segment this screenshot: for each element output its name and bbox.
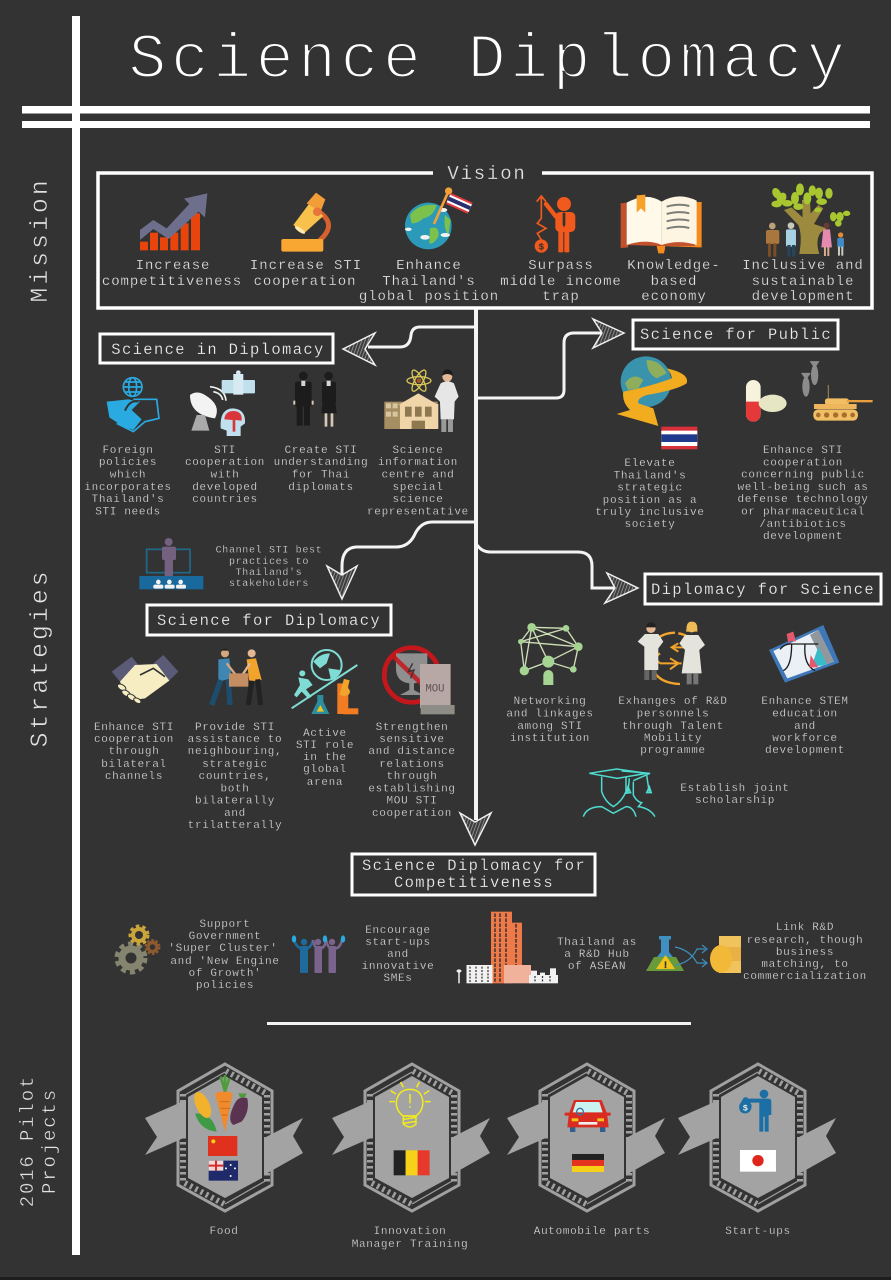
text: Enhance STEM education xyxy=(761,696,849,757)
icon: microscope xyxy=(281,193,329,252)
heading: Science Diplomacy for Competitiveness: Science Diplomacy for xyxy=(362,857,586,875)
text: Science information centre: information xyxy=(378,457,458,469)
text: Provide STI assistance: both xyxy=(220,784,250,796)
flag: Germany xyxy=(572,1154,604,1172)
vision heading: Vision xyxy=(447,163,527,185)
vision labels: development xyxy=(752,289,854,305)
text: Enhance STEM education: workforce xyxy=(772,733,838,745)
text: Encourage start-ups: start-ups xyxy=(365,937,431,949)
text: Networking and linkages: Networking xyxy=(514,696,586,708)
icon: prohibited glass and MOU xyxy=(384,648,455,714)
icon: prohibited glass and MOU: MOU xyxy=(425,684,445,696)
heading: Diplomacy for Science xyxy=(645,574,881,604)
heading: Science in Diplomacy xyxy=(100,334,333,363)
vision labels: Increase xyxy=(136,258,210,274)
text: Enhance STEM education: and xyxy=(794,721,816,733)
vision labels: Increase STI xyxy=(250,258,362,274)
text: Enhance STI public well-being: or pharmaceutical xyxy=(741,506,865,518)
text: Establish joint scholarship xyxy=(680,783,790,807)
text: Elevate Thailand's position: Thailand's xyxy=(614,470,686,482)
vision labels: Surpass xyxy=(528,258,594,274)
text: Enhance STI public well-being xyxy=(737,445,869,543)
text: Support Government: and 'New Engine xyxy=(170,956,280,968)
text: Link R&D research: business xyxy=(776,947,834,959)
text: Encourage start-ups: innovative xyxy=(362,961,434,973)
heading: Science Diplomacy for Competitiveness: Competitiveness xyxy=(394,874,554,892)
text: Strengthen sensitive relations: and distance xyxy=(368,746,456,758)
arrow: to Science for Diplomacy xyxy=(327,566,357,599)
panel: pilot projects xyxy=(145,1064,836,1251)
text: Support Government: 'Super Cluster' xyxy=(168,943,278,955)
text: Science information centre: science xyxy=(393,494,443,506)
vision labels: middle income xyxy=(500,274,622,290)
badge: Innovation xyxy=(332,1064,490,1211)
text: Establish joint scholarship: scholarship xyxy=(695,795,775,807)
text: Thailand as R&D Hub: a R&D Hub xyxy=(564,949,630,961)
text: Channel STI best practices: Channel STI best xyxy=(216,544,322,556)
flow lines xyxy=(342,309,618,820)
flag: Belgium xyxy=(394,1150,430,1175)
badge: Automobile parts xyxy=(507,1064,665,1211)
vision labels: sustainable xyxy=(752,274,854,290)
text: Foreign policies: Foreign xyxy=(103,445,153,457)
text: Create STI understanding: Create STI xyxy=(285,445,357,457)
text: Elevate Thailand's position: position as a xyxy=(603,495,697,507)
text: Thailand as R&D Hub: Thailand as xyxy=(557,937,637,949)
text: Active STI role: Active xyxy=(303,728,347,740)
label: Mission: Mission xyxy=(26,177,55,303)
text: Strengthen sensitive relations: establishing xyxy=(368,784,456,796)
text: Provide STI assistance: neighbouring, xyxy=(188,746,282,758)
text: Strengthen sensitive relations: relations xyxy=(379,759,445,771)
icon: tree and people xyxy=(766,183,850,257)
text: Strengthen sensitive relations: cooperation xyxy=(372,808,452,820)
icon: pills, bombs and tank xyxy=(746,362,873,422)
text: Support Government: policies xyxy=(196,980,254,992)
text: Foreign policies: which xyxy=(110,470,146,482)
arrow: to Science for Public xyxy=(593,319,624,348)
panel: Science for Public items xyxy=(595,356,873,543)
label: Automobile parts: Automobile parts xyxy=(534,1226,650,1238)
label: Innovation Manager Training: Manager Training xyxy=(352,1239,468,1251)
text: Provide STI assistance: countries, xyxy=(199,771,271,783)
flag: Japan xyxy=(740,1150,776,1172)
label: Innovation Manager Training xyxy=(352,1226,468,1251)
vision labels xyxy=(102,258,864,305)
icon: gears xyxy=(117,926,160,972)
text: Enhance STI cooperation: Enhance STI xyxy=(94,722,174,734)
text: Support Government: Government xyxy=(189,931,261,943)
text: Enhance STI cooperation: channels xyxy=(105,771,163,783)
text: Provide STI assistance: trilatterally xyxy=(188,820,282,832)
text: Networking and linkages: institution xyxy=(510,733,590,745)
icon: raised hands start-ups xyxy=(292,935,345,973)
text: Active STI role: arena xyxy=(307,777,343,789)
icon: man with money bag xyxy=(739,1090,771,1132)
flag: China xyxy=(208,1136,237,1156)
text: Enhance STEM education: development xyxy=(765,745,845,757)
heading: Science Diplomacy for Competitiveness xyxy=(352,854,595,895)
text: Networking and linkages xyxy=(506,696,594,745)
text: Enhance STI cooperation xyxy=(94,722,174,783)
text: Encourage start-ups: SMEs xyxy=(383,973,413,985)
text: Link R&D research: research, though xyxy=(747,935,863,947)
text: Support Government: Support xyxy=(200,919,250,931)
icon: presenter and audience xyxy=(139,538,203,589)
text: Foreign policies: STI needs xyxy=(95,506,161,518)
label: Food: Food xyxy=(209,1226,239,1238)
text: Provide STI assistance: strategic xyxy=(202,759,268,771)
label: Start-ups: Start-ups xyxy=(725,1226,791,1238)
text: Link R&D research: Link R&D xyxy=(776,922,834,934)
icon: network xyxy=(518,623,583,685)
text: Strengthen sensitive relations: sensitive xyxy=(379,734,445,746)
text: Enhance STI public well-being: concerning public xyxy=(741,470,865,482)
text: Create STI understanding xyxy=(274,445,368,494)
text: STI cooperation xyxy=(185,445,265,506)
text: Enhance STEM education: education xyxy=(772,708,838,720)
heading: Science for Diplomacy xyxy=(147,605,391,635)
icon: two people with a box xyxy=(212,649,262,705)
text: Active STI role xyxy=(296,728,354,789)
text: Science information centre: representative xyxy=(367,506,469,518)
text: Thailand as R&D Hub: of ASEAN xyxy=(568,961,626,973)
text: Enhance STI cooperation: cooperation xyxy=(94,734,174,746)
icon: active role xyxy=(292,650,358,714)
text: Link R&D research: matching, to xyxy=(761,959,849,971)
icon: building, atom and scientist xyxy=(384,368,459,432)
icon: blue handshake with globe xyxy=(107,378,159,432)
text: Enhance STI cooperation: through xyxy=(109,746,159,758)
label: 2016 Pilot Projects: 2016 Pilot xyxy=(17,1075,39,1207)
text: Enhance STI public well-being: /antibiotics xyxy=(759,519,847,531)
text: Provide STI assistance: and xyxy=(224,808,246,820)
text: Provide STI assistance: bilaterally xyxy=(195,796,275,808)
icon: rising chart xyxy=(140,193,207,250)
text: Encourage start-ups xyxy=(362,925,434,985)
icon: flask to gold coins: ! xyxy=(662,961,669,972)
text: Active STI role: STI role xyxy=(296,740,354,752)
panel: Science for Diplomacy items xyxy=(94,648,456,832)
text: Networking and linkages: and linkages xyxy=(506,708,594,720)
heading: Science for Public: Science for Public xyxy=(640,326,832,344)
icon: globe, arrow and Thai flag xyxy=(617,356,697,449)
text: Link R&D research xyxy=(743,922,867,983)
text: Science information centre: special xyxy=(393,482,443,494)
text: Networking and linkages: among STI xyxy=(517,721,583,733)
text: Active STI role: in the xyxy=(303,752,347,764)
text: Encourage start-ups: Encourage xyxy=(365,925,431,937)
badge: Start-ups xyxy=(678,1064,836,1211)
heading: Science for Diplomacy: Science for Diplomacy xyxy=(157,612,381,630)
icon: red car xyxy=(565,1100,611,1132)
arrow: to Diplomacy for Science xyxy=(605,573,638,603)
text: STI cooperation: STI xyxy=(214,445,236,457)
text: Establish joint scholarship: Establish joint xyxy=(680,783,790,795)
flag: Australia xyxy=(209,1161,238,1181)
vision labels: cooperation xyxy=(254,274,356,290)
text: Encourage start-ups: and xyxy=(387,949,409,961)
text: Enhance STI cooperation: bilateral xyxy=(101,759,167,771)
vision frame xyxy=(98,173,872,308)
icon: cream handshake xyxy=(112,655,178,705)
icon: pi notebook xyxy=(769,625,839,683)
heading: Diplomacy for Science: Diplomacy for Science xyxy=(651,581,875,599)
text: STI cooperation: with xyxy=(210,470,240,482)
text: Thailand as R&D Hub xyxy=(557,937,637,973)
text: Enhance STI public well-being: defense technology xyxy=(737,494,869,506)
label: Strategies: Strategies xyxy=(26,568,55,748)
icon: city towers xyxy=(456,912,558,983)
vision labels: global position xyxy=(359,289,499,305)
vision labels: competitiveness xyxy=(102,274,242,290)
icon: talent exchange xyxy=(638,622,705,684)
label: 2016 Pilot Projects xyxy=(17,1075,61,1207)
panel: Diplomacy for Science items xyxy=(506,622,849,817)
label: 2016 Pilot Projects: Projects xyxy=(39,1088,61,1194)
text: Exchanges of R&D personnels: personnels xyxy=(637,708,709,720)
text: Strengthen sensitive relations: Strengthen xyxy=(376,722,448,734)
icon: two diplomats xyxy=(293,372,337,427)
vision labels: trap xyxy=(542,289,580,305)
icon: open book xyxy=(621,195,702,253)
text: Strengthen sensitive relations xyxy=(368,722,456,820)
panel: vision xyxy=(98,163,872,308)
text: Channel STI best practices: practices to xyxy=(229,556,309,568)
title: Science Diplomacy xyxy=(129,25,849,96)
text: Foreign policies: Thailand's xyxy=(92,494,164,506)
vision labels: economy xyxy=(641,289,707,305)
text: Provide STI assistance: assistance to xyxy=(188,734,282,746)
icon: flask to gold coins xyxy=(646,936,741,973)
text: Create STI understanding: for Thai xyxy=(292,470,350,482)
icon: globe with Thai flag xyxy=(405,187,473,249)
text: Elevate Thailand's position: society xyxy=(625,519,675,531)
icon: corn, carrot, eggplant xyxy=(191,1075,248,1132)
text: Channel STI best practices: Thailand's xyxy=(236,567,302,579)
text: Exchanges of R&D personnels xyxy=(618,696,728,757)
text: Provide STI assistance xyxy=(188,722,282,832)
label: Innovation Manager Training: Innovation xyxy=(374,1226,446,1238)
text: Create STI understanding: diplomats xyxy=(288,482,354,494)
text: Foreign policies: policies xyxy=(99,457,157,469)
icon: satellite dish and head xyxy=(190,370,255,436)
heading: Science in Diplomacy: Science in Diplomacy xyxy=(111,341,325,359)
icon: man raising graph arrow xyxy=(535,196,575,253)
badge: Food xyxy=(145,1064,303,1211)
text: Strengthen sensitive relations: MOU STI xyxy=(387,796,437,808)
text: Create STI understanding: understanding xyxy=(274,457,368,469)
vision labels: Inclusive and xyxy=(742,258,864,274)
text: Science information centre xyxy=(367,445,469,518)
text: Exchanges of R&D personnels: programme xyxy=(640,745,706,757)
heading: Science for Public xyxy=(633,320,838,349)
icon: man with money bag: $ xyxy=(743,1104,748,1114)
text: STI cooperation: developed xyxy=(192,482,258,494)
text: Channel STI best practices xyxy=(216,544,322,590)
text: Exchanges of R&D personnels: Mobility xyxy=(644,733,702,745)
text: Elevate Thailand's position: truly inclusive xyxy=(595,507,705,519)
icon: light bulb xyxy=(389,1082,431,1127)
text: Exchanges of R&D personnels: Exhanges of R&D xyxy=(618,696,728,708)
text: Elevate Thailand's position: strategic xyxy=(617,482,683,494)
text: Enhance STEM education: Enhance STEM xyxy=(761,696,849,708)
text: Enhance STI public well-being: well-being such as xyxy=(737,482,869,494)
text: Science information centre: Science xyxy=(393,445,443,457)
panel: Science Diplomacy for Competitiveness items xyxy=(117,912,867,992)
text: STI cooperation: countries xyxy=(192,494,258,506)
text: STI cooperation: cooperation xyxy=(185,457,265,469)
text: Support Government xyxy=(168,919,280,992)
panel: Science in Diplomacy items xyxy=(84,368,469,590)
arrow: to competitiveness xyxy=(460,813,491,845)
vision labels: Enhance xyxy=(396,258,462,274)
text: Foreign policies: incorporates xyxy=(84,482,172,494)
vision labels: Thailand's xyxy=(382,274,476,290)
vision labels: Knowledge- xyxy=(627,258,721,274)
text: Foreign policies xyxy=(84,445,172,518)
arrow: to Science in Diplomacy xyxy=(343,333,375,365)
text: Strengthen sensitive relations: through xyxy=(387,771,437,783)
text: Enhance STI public well-being: cooperation xyxy=(763,458,843,470)
text: Elevate Thailand's position: Elevate xyxy=(625,458,675,470)
text: Enhance STI public well-being: development xyxy=(763,531,843,543)
text: Enhance STI public well-being: Enhance STI xyxy=(763,445,843,457)
text: Link R&D research: commercialization xyxy=(743,971,867,983)
text: Exchanges of R&D personnels: through Talent xyxy=(622,721,724,733)
text: Elevate Thailand's position xyxy=(595,458,705,531)
text: Channel STI best practices: stakeholders xyxy=(229,578,309,590)
text: Provide STI assistance: Provide STI xyxy=(195,722,275,734)
vision labels: based xyxy=(651,274,697,290)
text: Support Government: of Growth' xyxy=(189,968,261,980)
text: Active STI role: global xyxy=(303,764,347,776)
text: Science information centre: centre and xyxy=(382,470,454,482)
icon: graduates xyxy=(583,769,655,817)
icon: man raising graph arrow: $ xyxy=(539,241,545,252)
